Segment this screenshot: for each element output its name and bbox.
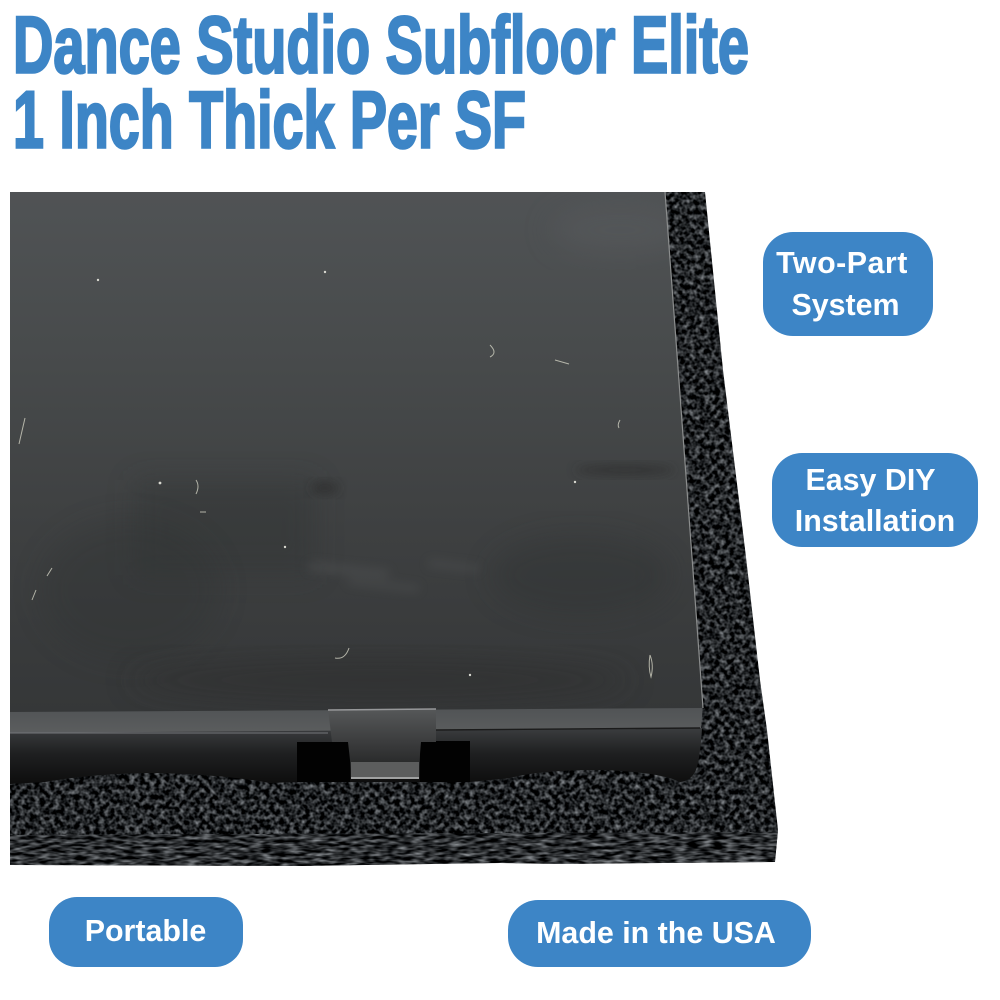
product photo: subfloor panel on rubber pad <box>10 192 785 867</box>
badge: Portable: Portable <box>85 914 206 948</box>
title: 1 Inch Thick Per SF <box>13 76 526 166</box>
badge: Easy DIY Installation: Easy DIY <box>805 463 936 497</box>
rubber underlayment pad <box>10 192 785 867</box>
title <box>13 0 749 166</box>
panel top surface <box>10 192 703 733</box>
badge: Two-Part System: System <box>791 288 900 322</box>
badge: Made in the USA: Made in the USA <box>536 916 776 950</box>
dust and scratches <box>19 345 652 677</box>
badge: Easy DIY Installation <box>772 453 978 547</box>
badge: Portable <box>49 897 243 967</box>
edge highlight <box>665 192 703 708</box>
badge: Two-Part System: Two-Part <box>776 246 908 280</box>
badge: Made in the USA <box>508 900 811 967</box>
badge: Two-Part System <box>763 232 933 336</box>
panel side wall with locking tab <box>10 704 703 784</box>
badge: Easy DIY Installation: Installation <box>795 504 955 538</box>
